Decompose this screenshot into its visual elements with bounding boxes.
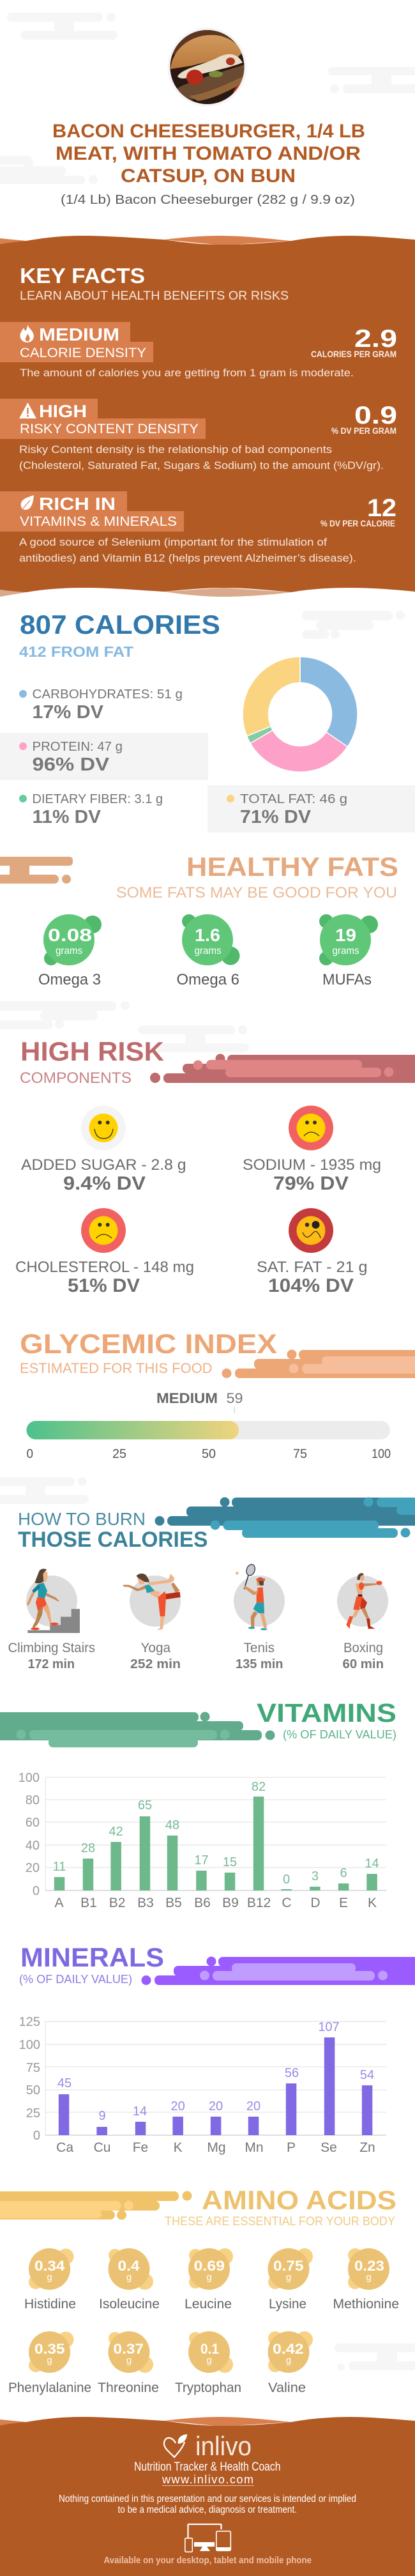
bar chart: vitamins: 6 bbox=[340, 1866, 347, 1880]
amino acid: histidine: Histidine bbox=[24, 2297, 76, 2312]
activity: yoga bbox=[123, 1574, 181, 1671]
fact: calorie density: CALORIE DENSITY bbox=[20, 346, 146, 360]
legend: carbohydrates bbox=[19, 687, 183, 723]
amino acid: histidine: 0.34 bbox=[34, 2258, 65, 2274]
bar chart: vitamins: B1 bbox=[80, 1896, 97, 1910]
bar chart: minerals: 25 bbox=[26, 2106, 40, 2120]
amino acid: leucine: 0.69 bbox=[194, 2258, 225, 2274]
activity: tennis bbox=[234, 1563, 285, 1671]
decorative cloud banner: minerals bbox=[142, 1956, 415, 1985]
risk item: saturated fat: SAT. FAT - 21 g bbox=[257, 1259, 368, 1276]
fact: rich in vitamins and minerals: RICH IN bbox=[39, 494, 116, 514]
amino acid: isoleucine: g bbox=[126, 2272, 132, 2283]
risk item: sodium bbox=[243, 1105, 381, 1194]
gauge: glycemic index: 59 bbox=[226, 1390, 243, 1406]
amino acid: threonine: 0.37 bbox=[114, 2341, 144, 2357]
decorative cloud banner: high risk bbox=[150, 1054, 415, 1083]
amino acid: methionine: Methionine bbox=[333, 2297, 399, 2312]
bar chart: minerals: 125 bbox=[19, 2015, 40, 2029]
amino acid: valine bbox=[268, 2331, 313, 2395]
bar chart: vitamins: 65 bbox=[138, 1798, 152, 1813]
bar chart: vitamins bbox=[19, 1771, 386, 1910]
amino acid: tryptophan: Tryptophan bbox=[175, 2380, 241, 2395]
stat: MUFAs: grams bbox=[332, 946, 359, 956]
subheading: glycemic index: ESTIMATED FOR THIS FOOD bbox=[20, 1360, 212, 1376]
stat: omega 6: 1.6 bbox=[195, 925, 220, 945]
bar chart: vitamins: 80 bbox=[26, 1793, 40, 1807]
stat: MUFAs: MUFAs bbox=[322, 971, 372, 988]
bar chart: vitamins: B12 bbox=[247, 1896, 271, 1910]
subheading: calories from fat: 412 FROM FAT bbox=[19, 643, 133, 660]
title: BACON CHEESEBURGER, 1/4 LB bbox=[52, 121, 365, 142]
stat: omega 6: Omega 6 bbox=[176, 971, 239, 988]
legend: protein bbox=[19, 740, 123, 775]
bar chart: vitamins: B5 bbox=[165, 1896, 182, 1910]
bar chart: minerals: P bbox=[287, 2140, 296, 2155]
bar chart: minerals: 50 bbox=[26, 2083, 40, 2097]
bar chart: vitamins: 14 bbox=[365, 1857, 379, 1871]
stat: omega 6 bbox=[176, 914, 240, 988]
fact: calorie density: MEDIUM bbox=[39, 325, 119, 344]
activity: boxing: Boxing bbox=[343, 1641, 383, 1655]
fact: rich in vitamins and minerals bbox=[0, 491, 396, 564]
header: food photo bbox=[167, 27, 246, 107]
risk item: saturated fat bbox=[257, 1208, 368, 1296]
amino acid: lysine: 0.75 bbox=[273, 2258, 304, 2274]
bar chart: minerals: 20 bbox=[246, 2099, 260, 2113]
heading: those calories: THOSE CALORIES bbox=[18, 1528, 208, 1552]
bar chart: minerals: Mg bbox=[207, 2140, 226, 2155]
decorative cloud banner: burn calories bbox=[155, 1498, 415, 1538]
amino acid: lysine bbox=[268, 2248, 313, 2312]
fact: risky content density bbox=[0, 399, 397, 471]
amino acid: isoleucine: Isoleucine bbox=[99, 2297, 160, 2312]
fact: risky content density: Risky Content density is the relationship of bad components bbox=[19, 443, 332, 456]
activity: climbing stairs: 172 min bbox=[28, 1657, 75, 1671]
legend: total fat: TOTAL FAT: 46 g bbox=[240, 792, 347, 806]
gauge: glycemic index: 50 bbox=[202, 1447, 216, 1461]
amino acid: threonine bbox=[98, 2331, 159, 2395]
heading: glycemic index: GLYCEMIC INDEX bbox=[20, 1329, 277, 1360]
fact: risky content density: % DV PER GRAM bbox=[331, 426, 396, 436]
amino acid: tryptophan bbox=[175, 2331, 241, 2395]
bar chart: vitamins: 60 bbox=[26, 1816, 40, 1830]
bar chart: minerals: 56 bbox=[285, 2066, 299, 2080]
disclaimer: Nothing contained in this presentation and our services is intended or implied bbox=[59, 2494, 356, 2504]
amino acid: lysine: Lysine bbox=[269, 2297, 306, 2312]
amino acid: valine: Valine bbox=[268, 2380, 306, 2395]
subtitle: serving size: (1/4 Lb) Bacon Cheeseburger (282 g / 9.9 oz) bbox=[61, 193, 355, 207]
amino acid: phenylalanine bbox=[8, 2331, 91, 2395]
tagline: Nutrition Tracker & Health Coach bbox=[134, 2460, 281, 2474]
risk item: added sugar: 9.4% DV bbox=[63, 1173, 146, 1194]
bar chart: vitamins: 17 bbox=[194, 1853, 209, 1867]
icon: boxing figure bbox=[346, 1573, 382, 1629]
risk item: sodium: SODIUM - 1935 mg bbox=[243, 1156, 381, 1174]
icon: leaf bbox=[21, 495, 34, 510]
subheading: amino acids: THESE ARE ESSENTIAL FOR YOUR BODY bbox=[165, 2215, 395, 2228]
fact: calorie density: 2.9 bbox=[354, 325, 397, 353]
bar chart: minerals: Mn bbox=[245, 2140, 264, 2155]
heading: healthy fats: HEALTHY FATS bbox=[186, 852, 398, 882]
bar chart: minerals: 100 bbox=[19, 2038, 40, 2052]
icon: warning triangle bbox=[19, 402, 36, 418]
panel: footer bbox=[0, 2417, 415, 2576]
bar chart: vitamins: 42 bbox=[109, 1825, 123, 1839]
fact: risky content density: (Cholesterol, Saturated Fat, Sugars & Sodium) to the amount (%DV/gr). bbox=[19, 459, 384, 471]
bar chart: vitamins: C bbox=[282, 1896, 292, 1910]
amino acid: tryptophan: 0.1 bbox=[200, 2341, 219, 2357]
bar chart: minerals: Se bbox=[321, 2140, 337, 2155]
stat: MUFAs: 19 bbox=[335, 925, 356, 945]
activity: yoga: 252 min bbox=[130, 1657, 181, 1671]
bar chart: minerals: Cu bbox=[94, 2140, 110, 2155]
bar chart: vitamins: 0 bbox=[283, 1873, 290, 1887]
fact: rich in vitamins and minerals: 12 bbox=[367, 494, 396, 522]
bar chart: vitamins: 20 bbox=[26, 1861, 40, 1875]
fact: rich in vitamins and minerals: VITAMINS & MINERALS bbox=[20, 514, 177, 529]
amino acid: lysine: g bbox=[286, 2272, 291, 2283]
legend: dietary fiber: 11% DV bbox=[32, 807, 102, 827]
heading: vitamins: VITAMINS bbox=[257, 1698, 396, 1728]
decorative cloud banner: amino acids bbox=[0, 2191, 192, 2220]
amino acid: tryptophan: g bbox=[206, 2355, 212, 2366]
amino acid: phenylalanine: Phenylalanine bbox=[8, 2380, 91, 2395]
bar chart: vitamins: K bbox=[368, 1896, 377, 1910]
panel: key facts bbox=[0, 236, 415, 597]
legend: carbohydrates: CARBOHYDRATES: 51 g bbox=[32, 687, 183, 702]
risk item: cholesterol bbox=[15, 1208, 194, 1296]
legend: protein: PROTEIN: 47 g bbox=[32, 740, 123, 754]
subheading: healthy fats: SOME FATS MAY BE GOOD FOR YOU bbox=[116, 884, 397, 901]
legend: dietary fiber: DIETARY FIBER: 3.1 g bbox=[32, 792, 163, 806]
risk item: cholesterol: CHOLESTEROL - 148 mg bbox=[15, 1259, 194, 1276]
disclaimer: to be a medical advice, diagnosis or treatment. bbox=[117, 2504, 297, 2515]
stat: omega 3: grams bbox=[56, 946, 82, 956]
heading: how to burn: HOW TO BURN bbox=[18, 1509, 146, 1529]
amino acid: leucine: Leucine bbox=[185, 2297, 232, 2312]
activity: boxing: 60 min bbox=[342, 1657, 384, 1671]
fact: calorie density bbox=[0, 322, 397, 379]
donut chart: macronutrients bbox=[243, 657, 358, 772]
decorative cloud banner: vitamins bbox=[0, 1712, 275, 1747]
bar chart: minerals: Ca bbox=[56, 2140, 73, 2155]
amino acid: threonine: g bbox=[126, 2355, 132, 2366]
bar chart: vitamins: A bbox=[54, 1896, 64, 1910]
gauge: glycemic index: 100 bbox=[372, 1447, 391, 1461]
heading: high risk: HIGH RISK bbox=[20, 1036, 164, 1066]
legend: total fat: 71% DV bbox=[240, 807, 312, 827]
fact: calorie density: CALORIES PER GRAM bbox=[311, 349, 396, 359]
amino acid: phenylalanine: 0.35 bbox=[34, 2341, 65, 2357]
legend: carbohydrates: 17% DV bbox=[32, 702, 104, 723]
activity: boxing bbox=[337, 1573, 388, 1671]
bar chart: vitamins: 48 bbox=[165, 1818, 179, 1832]
icon: tennis figure bbox=[236, 1563, 268, 1630]
legend: protein: 96% DV bbox=[32, 755, 110, 775]
heading: minerals: MINERALS bbox=[20, 1942, 164, 1972]
gauge: glycemic index: 0 bbox=[27, 1447, 33, 1461]
amino acid: valine: 0.42 bbox=[273, 2341, 304, 2357]
amino acid: leucine: g bbox=[206, 2272, 212, 2283]
amino acid: methionine: g bbox=[366, 2272, 372, 2283]
subheading: minerals: (% OF DAILY VALUE) bbox=[19, 1973, 132, 1986]
risk item: added sugar: ADDED SUGAR - 2.8 g bbox=[21, 1156, 186, 1174]
icon: climbing figure bbox=[27, 1568, 80, 1633]
bar chart: vitamins: 0 bbox=[33, 1884, 40, 1898]
activity: climbing stairs: Climbing Stairs bbox=[8, 1641, 95, 1655]
bar chart: vitamins: 3 bbox=[312, 1869, 319, 1883]
heading: calories: 807 CALORIES bbox=[20, 610, 220, 640]
amino acid: methionine bbox=[333, 2248, 399, 2312]
title: CATSUP, ON BUN bbox=[121, 165, 296, 187]
bar chart: vitamins: E bbox=[339, 1896, 348, 1910]
brand name: inlivo bbox=[195, 2431, 252, 2461]
stat: omega 3: Omega 3 bbox=[38, 971, 101, 988]
bar chart: vitamins: 82 bbox=[252, 1780, 266, 1794]
fact: rich in vitamins and minerals: antibodies) and Vitamin B12 (helps prevent Alzheimer’s disease). bbox=[19, 552, 356, 564]
legend: dietary fiber bbox=[19, 792, 163, 827]
subheading: vitamins: (% OF DAILY VALUE) bbox=[283, 1728, 396, 1741]
bar chart: vitamins: D bbox=[310, 1896, 321, 1910]
bar chart: minerals: 107 bbox=[318, 2020, 340, 2034]
bar chart: minerals bbox=[19, 2015, 386, 2155]
bar chart: minerals: K bbox=[174, 2140, 183, 2155]
bar chart: minerals: Zn bbox=[359, 2140, 375, 2155]
heading: key facts: KEY FACTS bbox=[20, 264, 145, 288]
activity: tennis: 135 min bbox=[236, 1657, 283, 1671]
amino acid: threonine: Threonine bbox=[98, 2380, 159, 2395]
amino acid: isoleucine bbox=[99, 2248, 160, 2312]
bar chart: vitamins: 100 bbox=[19, 1771, 40, 1785]
bar chart: vitamins: B9 bbox=[222, 1896, 239, 1910]
availability note: Available on your desktop, tablet and mobile phone bbox=[103, 2556, 312, 2566]
panel: macronutrient legend bbox=[0, 687, 415, 832]
activity: climbing stairs bbox=[8, 1568, 95, 1671]
bar chart: vitamins: 28 bbox=[81, 1841, 95, 1855]
website link: www.inlivo.com bbox=[162, 2473, 253, 2486]
fact: risky content density: HIGH bbox=[39, 401, 87, 421]
bar chart: minerals: 45 bbox=[57, 2076, 72, 2090]
icon: inlivo heart logo bbox=[164, 2434, 187, 2457]
amino acid: methionine: 0.23 bbox=[354, 2258, 384, 2274]
amino acid: isoleucine: 0.4 bbox=[117, 2258, 140, 2274]
legend: total fat bbox=[227, 792, 347, 827]
bar chart: vitamins: 11 bbox=[53, 1860, 66, 1874]
gauge: glycemic index: 25 bbox=[112, 1447, 126, 1461]
title: MEAT, WITH TOMATO AND/OR bbox=[56, 143, 361, 164]
icon: devices bbox=[185, 2524, 231, 2552]
stat: MUFAs bbox=[319, 914, 378, 988]
fact: calorie density: The amount of calories you are getting from 1 gram is moderate. bbox=[20, 367, 354, 379]
stat: omega 3: 0.08 bbox=[48, 925, 92, 945]
bar chart: vitamins: B3 bbox=[137, 1896, 154, 1910]
bar chart: vitamins: B6 bbox=[194, 1896, 211, 1910]
amino acid: histidine: g bbox=[47, 2272, 52, 2283]
risk item: sodium: 79% DV bbox=[273, 1173, 349, 1194]
risk item: saturated fat: 104% DV bbox=[268, 1275, 354, 1296]
gauge: glycemic index bbox=[27, 1390, 391, 1461]
decorative cloud banner: healthy fats bbox=[0, 857, 73, 884]
activity: yoga: Yoga bbox=[140, 1641, 170, 1655]
fact: rich in vitamins and minerals: A good source of Selenium (important for the stimulation of bbox=[19, 536, 327, 548]
amino acid: valine: g bbox=[286, 2355, 291, 2366]
risk item: cholesterol: 51% DV bbox=[68, 1275, 140, 1296]
fact: rich in vitamins and minerals: % DV PER CALORIE bbox=[321, 519, 395, 528]
amino acid: leucine bbox=[185, 2248, 233, 2312]
risk item: added sugar bbox=[21, 1105, 186, 1194]
icon: yoga figure bbox=[123, 1574, 181, 1630]
bar chart: minerals: 20 bbox=[170, 2099, 185, 2113]
stat: omega 6: grams bbox=[194, 946, 221, 956]
bar chart: minerals: 0 bbox=[33, 2129, 40, 2143]
bar chart: minerals: Fe bbox=[133, 2140, 148, 2155]
title bbox=[52, 121, 365, 187]
bar chart: minerals: 14 bbox=[133, 2104, 147, 2119]
bar chart: minerals: 9 bbox=[98, 2109, 106, 2123]
fact: risky content density: 0.9 bbox=[354, 402, 397, 429]
gauge: glycemic index: MEDIUM bbox=[156, 1390, 218, 1406]
bar chart: vitamins: B2 bbox=[109, 1896, 125, 1910]
fact: risky content density: RISKY CONTENT DENSITY bbox=[20, 422, 199, 436]
subheading: components: COMPONENTS bbox=[20, 1070, 132, 1087]
amino acid: phenylalanine: g bbox=[47, 2355, 52, 2366]
activity: tennis: Tenis bbox=[244, 1641, 275, 1655]
disclaimer bbox=[59, 2494, 356, 2515]
bar chart: minerals: 75 bbox=[26, 2061, 40, 2075]
bar chart: vitamins: 40 bbox=[26, 1839, 40, 1853]
heading: amino acids: AMINO ACIDS bbox=[202, 2185, 396, 2215]
bar chart: minerals: 20 bbox=[209, 2099, 223, 2113]
gauge: glycemic index: 75 bbox=[293, 1447, 307, 1461]
amino acid: histidine bbox=[24, 2248, 76, 2312]
decorative cloud banner: glycemic index bbox=[222, 1349, 415, 1378]
icon: flame bbox=[20, 325, 34, 342]
stat: omega 3 bbox=[38, 914, 102, 988]
bar chart: minerals: 54 bbox=[360, 2068, 374, 2082]
bar chart: vitamins: 15 bbox=[223, 1855, 237, 1869]
subheading: key facts: LEARN ABOUT HEALTH BENEFITS OR RISKS bbox=[20, 289, 289, 303]
